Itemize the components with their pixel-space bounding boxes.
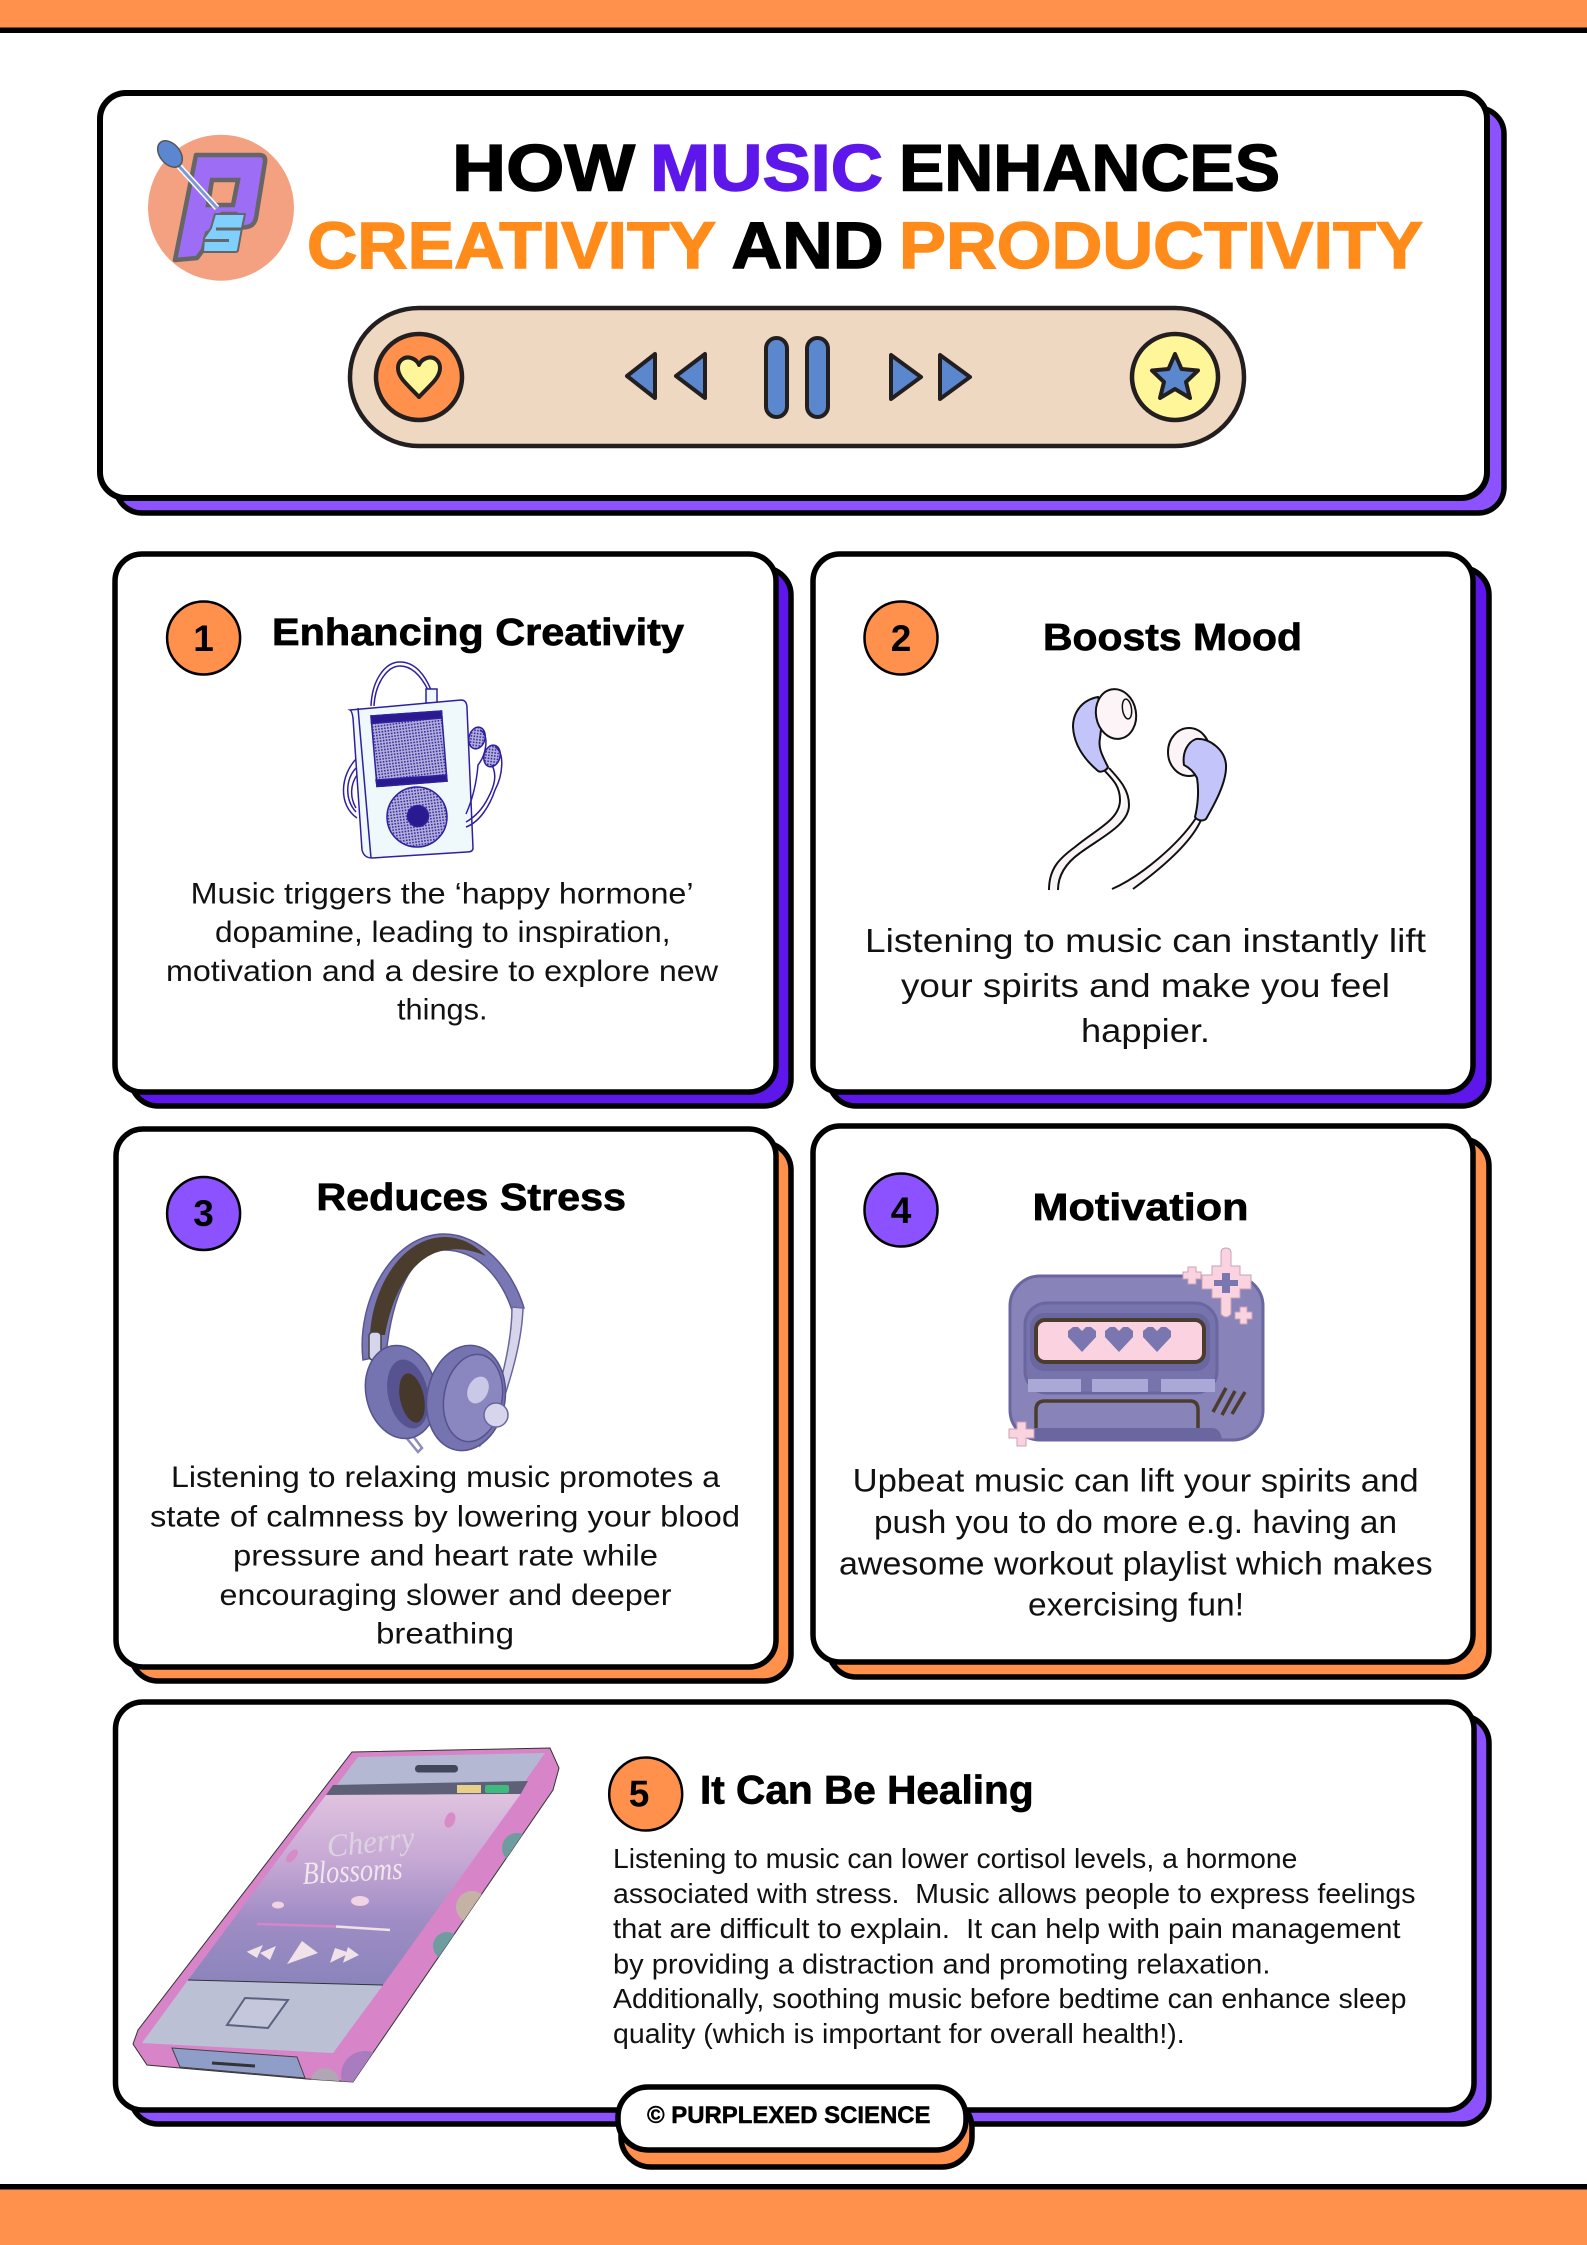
body text: Listening to music can lower cortisol levels, a hormone	[613, 1843, 1297, 1874]
body text: dopamine, leading to inspiration,	[215, 916, 670, 949]
body text	[865, 922, 1426, 1049]
title: MUSIC	[650, 130, 883, 204]
body text: your spirits and make you feel	[901, 967, 1390, 1004]
title	[307, 130, 1423, 282]
icon: rewind button	[627, 354, 705, 398]
title: AND	[732, 208, 884, 282]
heading: It Can Be Healing	[700, 1769, 1034, 1813]
icon: mp3 player with earphones	[343, 662, 503, 858]
number badge 5: 5	[629, 1774, 649, 1814]
body text: Upbeat music can lift your spirits and	[853, 1463, 1419, 1499]
body text: that are difficult to explain. It can help with pain management	[613, 1913, 1401, 1944]
body text: motivation and a desire to explore new	[166, 955, 718, 988]
icon: heart button	[376, 334, 462, 420]
number badge 2: 2	[891, 618, 911, 659]
panel: 5 it can be healing	[116, 1702, 1489, 2124]
body text: exercising fun!	[1028, 1587, 1244, 1623]
panel: 3 reduces stress	[116, 1129, 791, 1681]
phone screen title: Cherry	[325, 1819, 417, 1864]
number badge 3: 3	[193, 1193, 214, 1234]
body text	[166, 878, 718, 1026]
panel: header	[100, 93, 1504, 513]
body text: Music triggers the ‘happy hormone’	[191, 878, 694, 911]
heading: Boosts Mood	[1043, 617, 1302, 659]
icon: fast-forward button	[891, 355, 970, 399]
number badge 1: 1	[193, 618, 214, 659]
icon: headphones	[357, 1234, 524, 1457]
body text: pressure and heart rate while	[233, 1540, 658, 1572]
icon: star button	[1132, 334, 1218, 420]
icon: earbuds	[1049, 686, 1226, 890]
body text: awesome workout playlist which makes	[839, 1546, 1433, 1582]
title: PRODUCTIVITY	[899, 208, 1423, 282]
body text: Listening to relaxing music promotes a	[171, 1461, 720, 1494]
phone screen title	[301, 1819, 417, 1891]
title: ENHANCES	[899, 130, 1280, 204]
body text: associated with stress. Music allows people to express feelings	[613, 1878, 1416, 1909]
phone screen title: Blossoms	[301, 1850, 403, 1891]
number badge 2	[864, 602, 938, 674]
number badge 3	[167, 1177, 240, 1250]
body text: encouraging slower and deeper	[220, 1579, 672, 1612]
number badge 1	[167, 602, 240, 674]
top orange bar	[0, 0, 1587, 33]
footer credit pill: © PURPLEXED SCIENCE	[647, 2102, 930, 2129]
body text: quality (which is important for overall health!).	[613, 2018, 1185, 2049]
icon: pause button	[766, 338, 828, 417]
body text: push you to do more e.g. having an	[874, 1504, 1397, 1540]
icon: pager	[1009, 1248, 1263, 1446]
panel: 1 enhancing creativity	[115, 554, 791, 1106]
panel: 2 boosts mood	[813, 554, 1489, 1106]
title: HOW	[452, 130, 636, 204]
footer credit pill	[618, 2087, 972, 2167]
number badge 4: 4	[891, 1190, 912, 1231]
body text	[839, 1463, 1433, 1623]
heading: Reduces Stress	[316, 1177, 626, 1219]
number badge 5	[609, 1758, 682, 1830]
body text	[150, 1461, 740, 1651]
title: CREATIVITY	[307, 208, 716, 282]
body text: things.	[397, 994, 488, 1026]
music player control bar	[350, 308, 1244, 446]
bottom orange bar	[0, 2184, 1587, 2245]
body text: Additionally, soothing music before bedtime can enhance sleep	[613, 1983, 1406, 2014]
number badge 4	[864, 1174, 938, 1246]
icon: smartphone	[133, 1748, 559, 2099]
body text: Listening to music can instantly lift	[865, 922, 1426, 959]
body text: state of calmness by lowering your blood	[150, 1500, 740, 1534]
body text: happier.	[1081, 1012, 1210, 1049]
body text: by providing a distraction and promoting relaxation.	[613, 1948, 1270, 1979]
icon: Purplexed Science logo	[148, 135, 294, 281]
heading: Motivation	[1032, 1187, 1248, 1229]
heading: Enhancing Creativity	[272, 612, 684, 654]
body text: breathing	[376, 1618, 514, 1651]
body text	[613, 1843, 1416, 2049]
panel: 4 motivation	[813, 1126, 1489, 1677]
